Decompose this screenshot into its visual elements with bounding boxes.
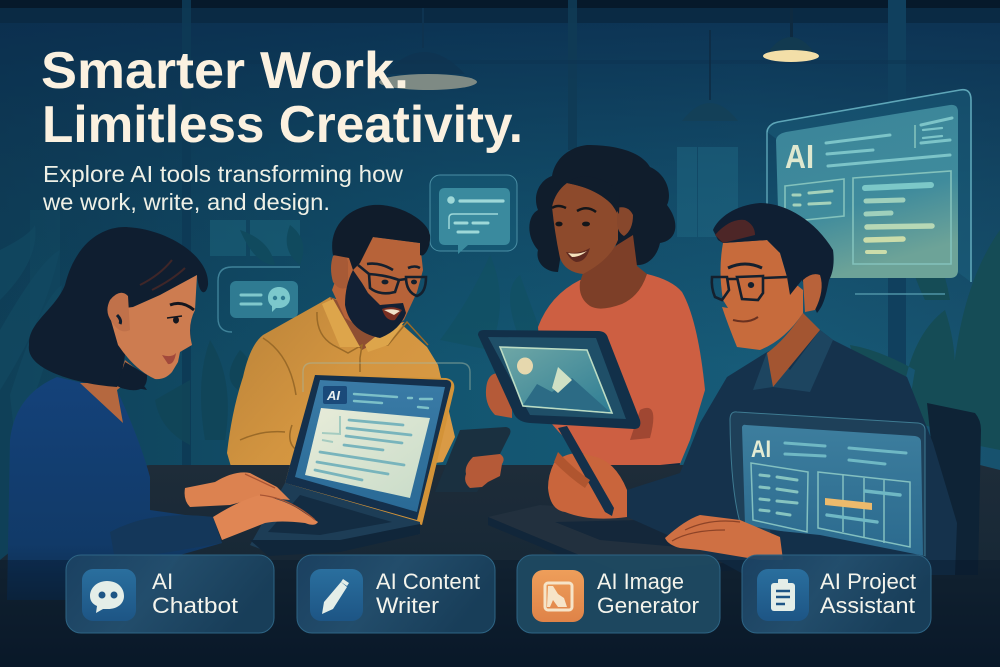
- curly hair: [529, 145, 675, 272]
- chip label: Writer: [376, 593, 440, 618]
- floating panel: AI dashboard: [767, 90, 971, 300]
- stylus and hand: [548, 426, 627, 519]
- title: [41, 42, 523, 154]
- floating chat bubble: left: [218, 267, 300, 332]
- frame behind laptop: [303, 363, 470, 392]
- chip label: AI Content: [376, 569, 481, 594]
- laptop with AI writer: [250, 375, 454, 556]
- chip label: AI Project: [820, 569, 917, 594]
- chip: AI Content Writer: [297, 555, 495, 633]
- chip: AI Project Assistant: [742, 555, 931, 633]
- person: woman on left: [7, 227, 222, 600]
- icon: pencil: [310, 569, 363, 621]
- chip label: Chatbot: [152, 593, 239, 618]
- chip: AI Chatbot: [66, 555, 274, 633]
- title: Limitless Creativity.: [42, 96, 523, 154]
- sleeve and hand on keyboard: [665, 515, 925, 575]
- bottom vignette: [0, 560, 1000, 667]
- phone and hand: [435, 427, 510, 492]
- subtitle: we work, write, and design.: [42, 189, 330, 215]
- subtitle: Explore AI tools transforming how: [43, 161, 404, 187]
- tablet with image: [478, 330, 640, 429]
- floating chat bubble: upper: [430, 175, 517, 254]
- laptop bottom right: [488, 505, 760, 580]
- person: man with glasses, dark shirt: [627, 203, 981, 575]
- icon: image: [532, 570, 584, 622]
- person: man in yellow shirt: [227, 205, 455, 480]
- chip label: AI Image: [597, 569, 684, 594]
- person: woman in coral top: [486, 145, 705, 484]
- typing hands: [185, 472, 318, 540]
- background plants: [0, 200, 1000, 450]
- chip label: Assistant: [820, 593, 916, 618]
- icon: clipboard: [757, 569, 809, 621]
- chip label: Generator: [597, 593, 700, 618]
- title: Smarter Work.: [41, 42, 409, 100]
- subtitle: [42, 161, 404, 215]
- hair: [29, 227, 208, 390]
- chip: AI Image Generator: [517, 555, 720, 633]
- panel heading: AI: AI: [785, 138, 814, 175]
- chip label: AI: [152, 569, 173, 594]
- icon: chat bubble: [82, 569, 136, 621]
- table: [0, 465, 1000, 667]
- laptop with AI writer: AI: [326, 388, 340, 403]
- foreground panel: AI project: [730, 412, 925, 556]
- panel heading: AI: AI: [751, 436, 771, 463]
